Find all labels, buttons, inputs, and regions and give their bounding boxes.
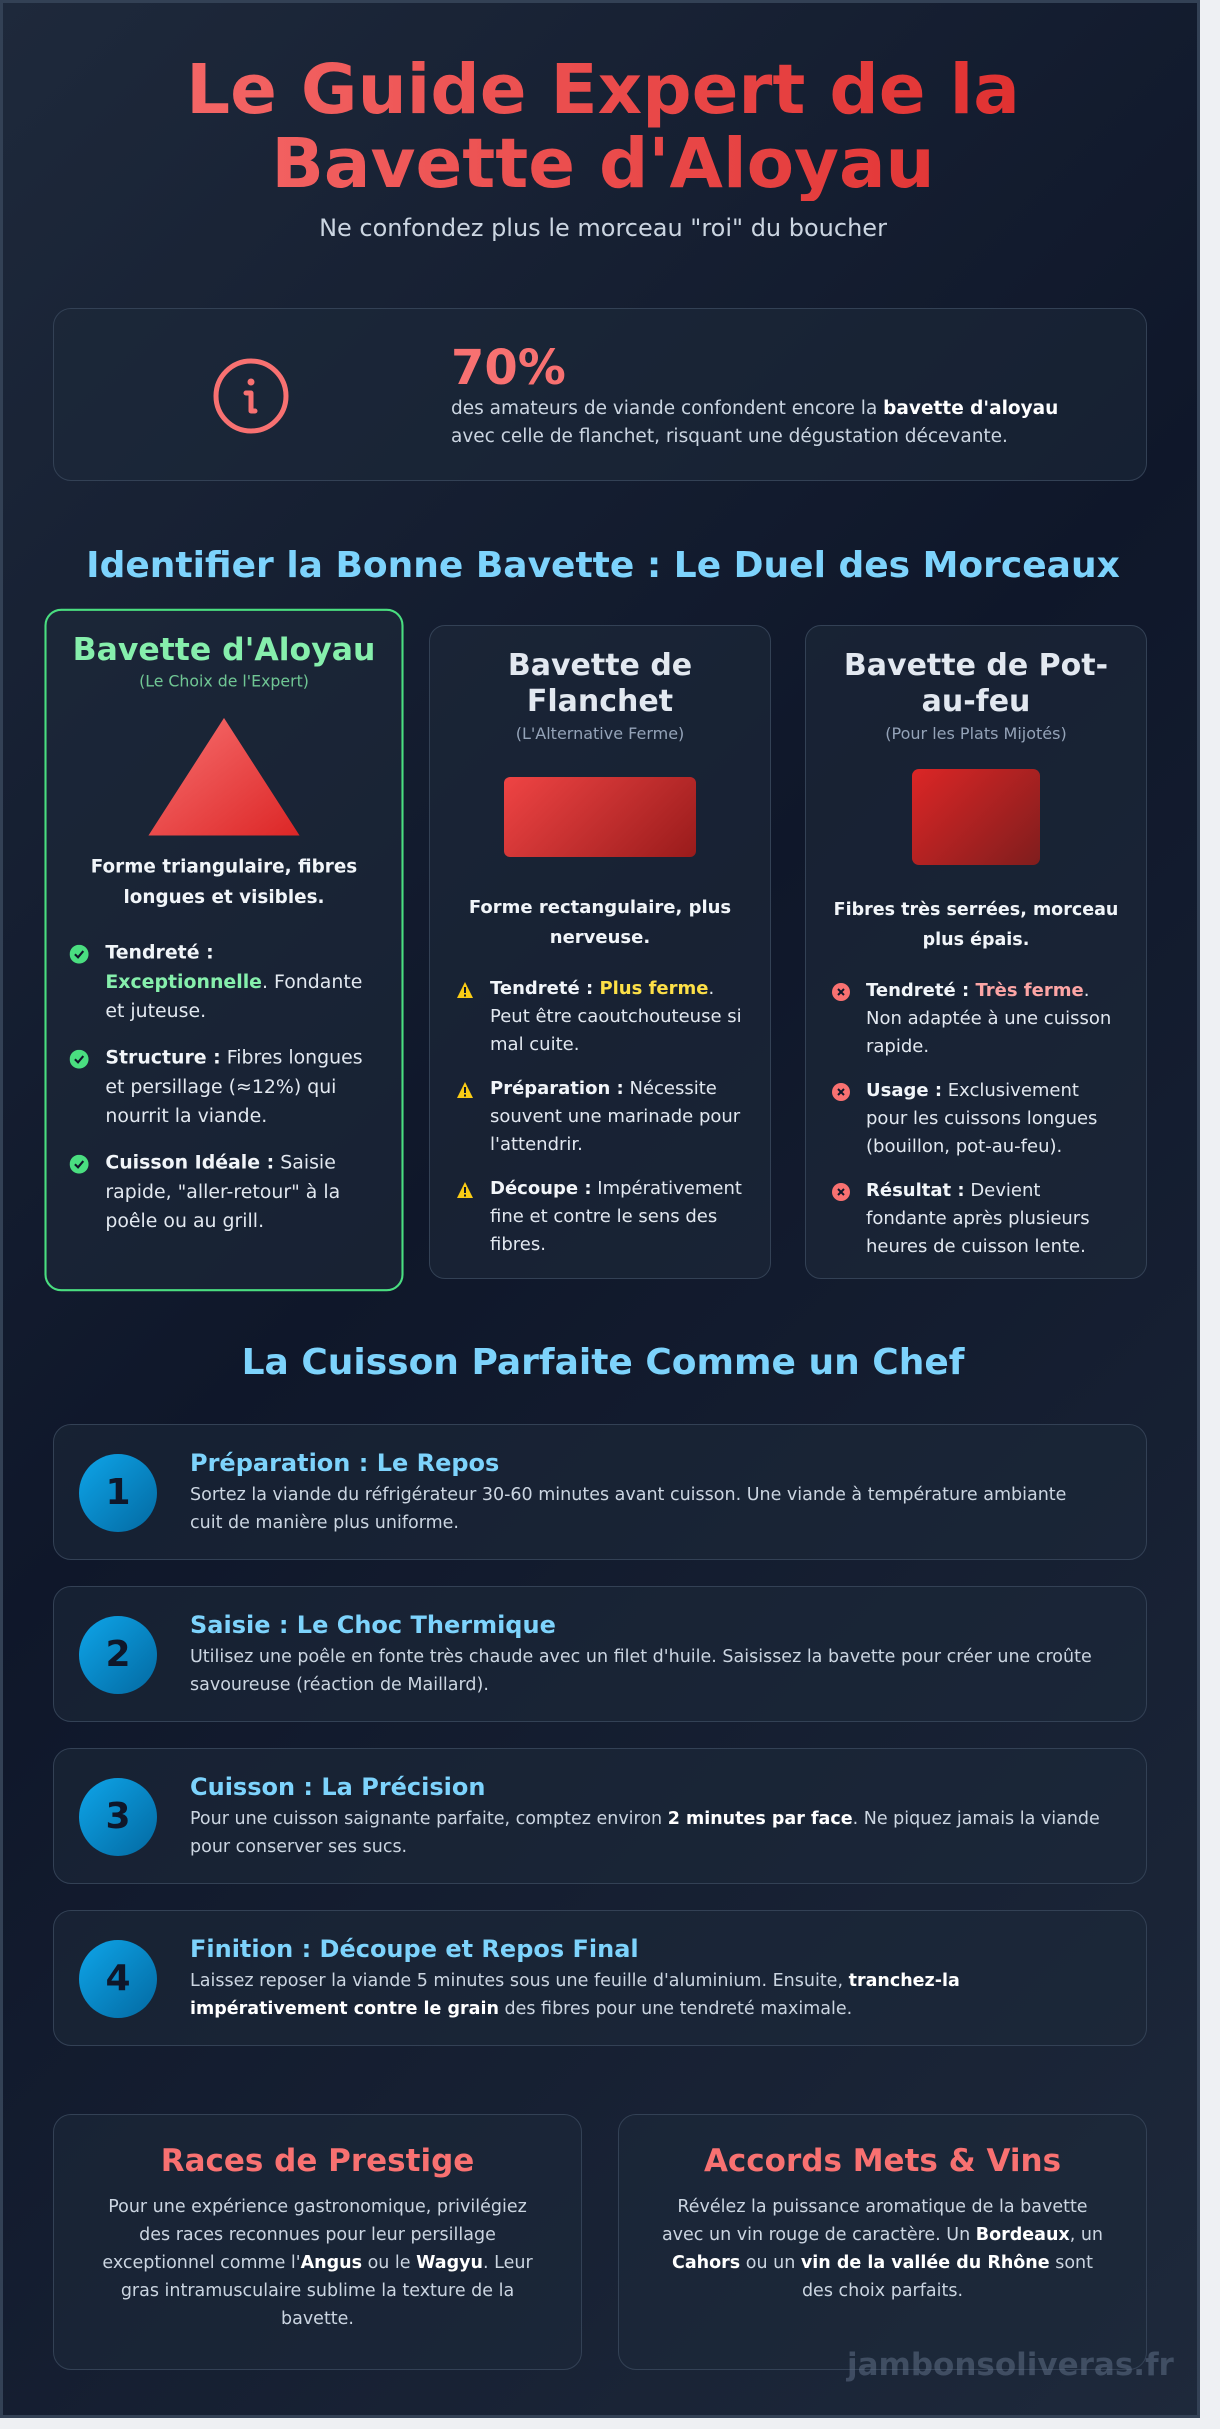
panel: races: Pour une expérience gastronomique, privilégiez des races reconnues pour leur persillage exceptionnel comme l'Angus ou le Wagyu. Leur gras intramusculaire sublime la texture de la bavette.	[102, 2197, 533, 2329]
panel: races	[53, 2114, 582, 2370]
card: flanchet	[429, 625, 771, 1279]
watermark: jambonsoliveras.fr	[847, 2347, 1174, 2383]
card: aloyau: Tendreté :	[105, 942, 214, 964]
stat text: 70%	[451, 340, 566, 396]
card: pot-au-feu: Résultat : Devient fondante après plusieurs heures de cuisson lente.	[866, 1180, 1090, 1257]
card: aloyau: Cuisson Idéale : Saisie rapide, "aller-retour" à la poêle ou au grill.	[105, 1152, 340, 1232]
step 1: Préparation : Le Repos	[190, 1449, 499, 1477]
card: pot-au-feu: Fibres très serrées, morceau plus épais.	[834, 900, 1118, 950]
step 2: Saisie : Le Choc Thermique	[190, 1611, 556, 1639]
card: pot-au-feu	[805, 625, 1147, 1279]
card: pot-au-feu: Usage : Exclusivement pour les cuissons longues (bouillon, pot-au-feu).	[866, 1080, 1097, 1157]
card: flanchet: Tendreté : Plus ferme. Peut être caoutchouteuse si mal cuite.	[490, 978, 742, 1055]
card: pot-au-feu: (Pour les Plats Mijotés)	[885, 724, 1067, 743]
card: aloyau: Forme triangulaire, fibres longues et visibles.	[91, 857, 357, 908]
heading: cuisson: La Cuisson Parfaite Comme un Chef	[242, 1342, 964, 1383]
step 1: 1	[105, 1472, 131, 1513]
step 1: Sortez la viande du réfrigérateur 30-60 minutes avant cuisson. Une viande à température ambiante cuit de manière plus uniforme.	[190, 1485, 1066, 1533]
step 3: Pour une cuisson saignante parfaite, comptez environ 2 minutes par face. Ne piquez jamais la viande pour conserver ses sucs.	[190, 1809, 1100, 1857]
title: Bavette d'Aloyau	[271, 124, 935, 204]
card: pot-au-feu: Tendreté : Très ferme. Non adaptée à une cuisson rapide.	[866, 980, 1111, 1057]
step 2: 2	[105, 1634, 131, 1675]
card: flanchet: Préparation : Nécessite souvent une marinade pour l'attendrir.	[490, 1078, 740, 1155]
card: flanchet: Bavette de Flanchet	[508, 648, 692, 719]
title	[3, 53, 1203, 201]
stat text	[451, 340, 1058, 447]
step 4: Laissez reposer la viande 5 minutes sous une feuille d'aluminium. Ensuite, tranchez-la impérativement contre le grain des fibres pour une tendreté maximale.	[190, 1971, 960, 2019]
step 3	[53, 1748, 1147, 1884]
step 4: 4	[105, 1958, 131, 1999]
card: aloyau: Structure : Fibres longues et persillage (≈12%) qui nourrit la viande.	[105, 1047, 363, 1127]
step 1	[53, 1424, 1147, 1560]
stat text: des amateurs de viande confondent encore la bavette d'aloyau avec celle de flanchet, risquant une dégustation décevante.	[451, 398, 1058, 447]
icon: rectangle	[504, 777, 696, 857]
step 2	[53, 1586, 1147, 1722]
card: aloyau	[44, 609, 404, 1291]
step 2: Utilisez une poêle en fonte très chaude avec un filet d'huile. Saisissez la bavette pour créer une croûte savoureuse (réaction de Maillard).	[190, 1647, 1092, 1695]
heading: duel: Identifier la Bonne Bavette : Le Duel des Morceaux	[86, 545, 1120, 586]
icon: block	[912, 769, 1040, 865]
card: pot-au-feu: Bavette de Pot-au-feu	[844, 648, 1108, 719]
card: aloyau: Bavette d'Aloyau	[73, 632, 375, 669]
stat panel	[53, 308, 1147, 481]
card: flanchet: (L'Alternative Ferme)	[516, 724, 684, 743]
card: aloyau: (Le Choix de l'Expert)	[139, 672, 309, 691]
title: Le Guide Expert de la	[186, 50, 1020, 130]
subtitle: Ne confondez plus le morceau "roi" du boucher	[319, 214, 887, 242]
panel: vins: Révélez la puissance aromatique de la bavette avec un vin rouge de caractère. Un Bordeaux, un Cahors ou un vin de la vallée du Rhône sont des choix parfaits.	[662, 2197, 1103, 2301]
card: aloyau: Exceptionnelle. Fondante et juteuse.	[105, 971, 362, 1022]
card: flanchet: Découpe : Impérativement fine et contre le sens des fibres.	[490, 1178, 742, 1255]
card: flanchet: Forme rectangulaire, plus nerveuse.	[469, 897, 731, 948]
step 4	[53, 1910, 1147, 2046]
icon: info	[214, 358, 288, 434]
step 3: 3	[105, 1796, 131, 1837]
step 4: Finition : Découpe et Repos Final	[190, 1935, 639, 1963]
step 3: Cuisson : La Précision	[190, 1773, 485, 1801]
panel: races: Races de Prestige	[161, 2143, 474, 2179]
panel: vins	[618, 2114, 1147, 2370]
panel: vins: Accords Mets & Vins	[704, 2143, 1061, 2179]
icon: triangle	[148, 718, 300, 836]
